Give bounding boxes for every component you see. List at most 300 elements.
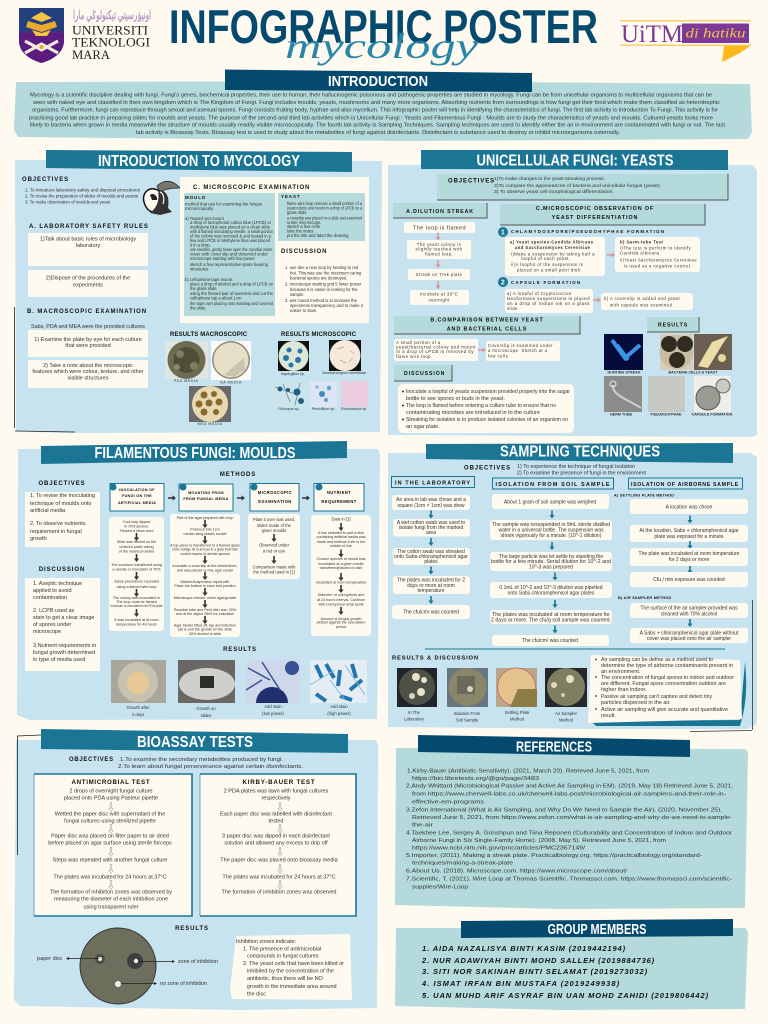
column: isolation of airborne sample: A location was chose <box>666 504 713 510</box>
column 3 steps: a red or eye <box>263 548 286 554</box>
results macroscopic <box>165 332 251 426</box>
mould method box: a) Teased wet mount <box>185 216 225 221</box>
banner: sampling <box>426 443 733 463</box>
reference list: 6.About Us. (2018). Microscope.com. https://www.microscope.com/about/ <box>406 868 628 874</box>
discussion text: specimens transparency and to make it <box>290 303 364 308</box>
column 1 steps: temperature for 48 hours <box>116 622 157 626</box>
photo: air sampler method <box>545 668 587 722</box>
member list: 4. ISMAT IRFAN BIN MUSTAFA (2019249938) <box>421 979 620 988</box>
column 4 steps: Incubated at room temperature <box>316 580 366 584</box>
text box: discussion bullets: Air sampling can be define as a method used to <box>601 657 713 663</box>
column 3 steps <box>248 514 300 579</box>
section A: dilution streak flow: A.DILUTION STREAK <box>406 209 474 215</box>
column 1 steps: a needle or inoculator of 70% <box>113 568 161 572</box>
heading: results bioassay: RESULTS <box>175 926 209 932</box>
photo: PDA plate <box>165 341 208 379</box>
capsule formation: b) A coverslip is added and yeast <box>604 296 680 301</box>
column: isolation of airborne sample: cover was placed onto the air sampler <box>647 636 731 642</box>
banner: bioassay <box>41 729 348 753</box>
yeast method box: under microscope. <box>287 220 321 225</box>
section C: microscopic observation heading: C.MICROSCOPIC OBSERVATION OF <box>536 206 654 212</box>
column 1 steps: Flamed a clean wool <box>120 529 154 533</box>
column 2 steps: Inoculate a coverslip at the wire/bottom, <box>173 564 237 568</box>
discussion: moulds: stain to get a clear image <box>33 615 94 621</box>
column 4 steps: at 24 hours interval. Continue <box>317 598 365 602</box>
text block: introduction paragraph: organisms. Furthermore, fungi can reproduce through sexual and asexual spores. Fungi consists fruiting body, hyphae and also mycelium. This infographic poster will help in identifying the characteristics of fungi. The first lab activity is Introduction To Fungi. This activity is for <box>32 108 718 114</box>
column 2 steps: of the cottage bit to and put in a glass Petri dish <box>172 548 238 552</box>
box: kirby-bauer test: tested <box>269 818 283 824</box>
column 1 steps: Cool loop dipped <box>123 520 150 524</box>
photo: add stain low power: (low power) <box>262 711 284 716</box>
chlamydospore/pseudohyphae formation: Candida Albicans. <box>620 250 661 256</box>
section B: comparison of yeast and bacteria: flame wire loop <box>396 354 431 359</box>
column 2 steps: Poke/cut into 1cm <box>190 528 220 532</box>
discussion text: hot. This was use the maximum caring <box>290 270 362 276</box>
text box: inhibition zones indicate: compounds in fungal cultures <box>247 954 319 960</box>
column: in the laboratory: temperature <box>418 588 445 594</box>
results: yeasts: GERM TUBE <box>610 412 633 416</box>
mould method box: using the flamed pair of tweezers and cut the <box>190 291 274 296</box>
chlamydospore/pseudohyphae formation: and Saccharomyces Cerevisiae <box>515 245 590 250</box>
box: kirby-bauer test: The formation of inhibition zones was observed <box>222 890 336 896</box>
column: isolation from soil: shook vigorously for a minute. (10^-1 dilution) <box>501 533 602 539</box>
mould method box: method that use for examining the fungus <box>185 202 262 206</box>
reference list: 3.Zefon International (What is Air Sampling, and Why Do We Need to Sample the Air). (2020, November 25). <box>406 808 723 814</box>
objectives: sampling: OBJECTIVES <box>464 466 511 472</box>
objectives: bioassay: 2.To learn about fungal perseverance against certain disinfectants. <box>118 764 304 770</box>
heading: results and discussion: RESULTS & DISCUSSION <box>392 656 479 662</box>
method headers: EXAMINATION <box>258 499 292 504</box>
column: isolation from soil: 0.1mL of 10^-2 and 10^-3 dilution was pipetted <box>499 585 603 591</box>
logo: UiTM di hatiku: UiTM <box>621 21 683 48</box>
column: in the laboratory: The cotton swab was streaked <box>397 549 465 555</box>
banner: group members: GROUP MEMBERS <box>548 922 647 938</box>
text box: discussion bullets: are different. Fungal spore concentration outdoor are <box>601 681 726 687</box>
photo: growth on slides: slides <box>201 713 211 718</box>
column: isolation of airborne sample: ISOLATION OF AIRBORNE SAMPLE <box>631 482 739 488</box>
method headers: ARTIFICIAL MEDIA <box>118 501 156 505</box>
objectives box: 1)To make changes to the yeast streaking process. <box>494 176 605 181</box>
panel: introduction <box>14 70 752 141</box>
column 1 steps: Same procedures repeated <box>114 580 159 584</box>
icon: mushroom <box>144 181 180 215</box>
column: isolation of airborne sample: The plate was incubated at room temperature <box>639 551 740 557</box>
column 4 steps: middle of line <box>330 544 352 548</box>
objectives: sampling: 2) To examine the presence of fungi in the environment <box>517 470 646 476</box>
reference list: 5.Importer. (2011). Making a streak plate. Practicalbiology.org. https://practicalbiology.org/standard- <box>406 853 702 859</box>
yeast method box: take the notes <box>287 228 313 234</box>
photo: isolation from soil sample <box>447 668 488 722</box>
objectives: moulds <box>25 481 100 547</box>
column: isolation from soil: bottle for a few minute. Serial dilution for 10^-2 and <box>491 559 611 565</box>
reference list: https://bio.libretexts.org/@go/page/3483 <box>412 776 539 782</box>
results: yeasts: BACTERIA CELLS & YEAST <box>669 370 718 374</box>
photo: cream yeast colonies <box>694 334 732 370</box>
mould method box: MOULD <box>185 195 206 200</box>
section A: laboratory safety rules: experiments <box>73 282 103 288</box>
discussion text: 3. wet mount method is to increase the <box>285 298 358 303</box>
figure: agar plate with inhibition zones: paper disc <box>37 956 63 962</box>
panel: C microscopic examination: C. MICROSCOPIC EXAMINATION <box>193 185 310 191</box>
section C: microscopic observation heading: YEAST DIFFERENTIATION <box>552 215 638 221</box>
column: isolation from soil: onto Sabs-chloramphenicol agar plates <box>508 590 595 596</box>
capsule formation: CAPSULE FORMATION <box>511 280 581 285</box>
objectives: 3. To make observation of moulds and yeast <box>25 200 111 204</box>
photo: germ tube <box>604 376 642 412</box>
column: isolation from soil: ISOLATION FROM SOIL SAMPLE <box>496 482 610 488</box>
text box: discussion bullets: result. <box>601 713 616 719</box>
column 3 steps: Observed under <box>259 542 290 548</box>
column: isolation from soil: 2 days or more. The cfu/g soil sample was counted. <box>491 618 611 624</box>
column 3 steps: Comparison made with <box>253 564 296 570</box>
photo: settling plate method: Method <box>510 716 525 722</box>
discussion: moulds: microscope <box>33 629 61 635</box>
column 3 steps: given moulds <box>262 528 286 533</box>
photo: growth on slides: Growth on <box>196 706 216 711</box>
column: in the laboratory: An area in lab was chose and a <box>396 497 466 503</box>
box: antimicrobial test: placed onto PDA using Pasteur pipette <box>64 796 158 802</box>
column 4 steps: A line selected to part a dish <box>318 531 364 535</box>
box: antimicrobial test: Wetted the paper disc with supernatant of the <box>55 812 165 818</box>
panel: references <box>395 735 748 909</box>
column: isolation of airborne sample: The surface of the air sampler provided was <box>640 606 738 612</box>
reference list: Retrieved June 5, 2021, from https://www.zefon.com/what-is-air-sampling-and-why-do-we-need-to-sample- <box>412 815 732 821</box>
photo: growth after 2 days: 2 days <box>132 712 144 717</box>
objectives: moulds: 2. To observe nutrients <box>30 521 86 527</box>
column: in the laboratory: The cfu/cm² was counted <box>403 610 459 616</box>
objectives: 2. To revise the preparation of slides of moulds and yeasts <box>25 194 138 198</box>
banner: moulds <box>41 441 347 464</box>
column: isolation from soil: The cfu/cm² was counted <box>522 638 578 644</box>
reference list: https://www.ncbi.nlm.nih.gov/pmc/articles/PMC2367149/ <box>412 846 586 852</box>
box: antimicrobial test: using transparent ruler <box>83 904 139 910</box>
box: antimicrobial test: ANTIMICROBIAL TEST <box>72 779 150 786</box>
photo: add stain high power <box>310 660 367 716</box>
column 1 steps: The loop must be flamed <box>116 600 157 604</box>
discussion text: 1. use dee a new loop by heating to red <box>285 265 359 270</box>
text box: inhibition zones indicate: Inhibition zones indicate: <box>236 939 297 945</box>
subtitle: mycology script: mycology <box>285 26 478 66</box>
capsule formation: slide <box>507 306 518 311</box>
column: in the laboratory: square (1cm × 1cm) was drew <box>397 503 465 509</box>
column 2 steps: (all is and the growth on the slide <box>178 628 232 632</box>
photo: in the laboratory <box>397 668 437 722</box>
discussion: moulds: 2. LCPB used as <box>33 608 75 614</box>
photo: isolation from soil sample: Soil Sample <box>456 718 479 722</box>
discussion: moulds: of spores under <box>33 622 71 628</box>
yeast method box: yeast colony and mount in a drop of LPCB on a <box>287 206 363 210</box>
column: isolation from soil: water in a universal bottle. The suspension was <box>499 528 604 534</box>
banner: yeasts: UNICELLULAR FUNGI: YEASTS <box>476 152 674 170</box>
column 2 steps <box>170 514 240 637</box>
text block: introduction paragraph: Mycology is a scientific discipline dealing with fungi. Fungi's genes, biochemical properties, their use to human, their hallucinogenic poisonous and pathogenic properties are studied in mycology. Fungi can be from unicellular organisms to multicellular organisms that can be <box>30 92 712 98</box>
section A: dilution streak flow: flamed loop. <box>425 252 453 256</box>
column 2 steps: cooled layers of dental spread <box>180 552 230 556</box>
box: antimicrobial test: Steps was repeated with another fungal culture <box>53 858 167 864</box>
photo: add stain low power <box>246 660 300 716</box>
discussion: yeasts: Streaking for isolation is to produce isolated colonies of an organism on <box>406 417 568 423</box>
column 4 steps: plotted against the inoculation <box>317 620 365 624</box>
university name: MARA <box>72 47 111 62</box>
column: in the laboratory: area <box>426 530 436 536</box>
panel: filamentous fungi moulds <box>17 441 380 720</box>
column: isolation from soil <box>490 478 614 646</box>
objectives: moulds: requirement in fungal <box>30 529 82 535</box>
column 3 steps: the method used in [1] <box>253 570 295 574</box>
section A: dilution streak flow: overnight <box>428 298 450 302</box>
discussion text: bacterial spores are destroyed. <box>290 276 348 280</box>
text box: inhibition zones indicate: 2. The yeast cells that have been killed or <box>243 961 344 967</box>
results microscopic: RESULTS MICROSCOPIC <box>281 332 357 338</box>
column: in the laboratory: A wet cotton swab was used to <box>397 520 465 526</box>
figure: agar plate with inhibition zones: no zone of inhibition <box>160 981 207 987</box>
reference list <box>406 768 734 890</box>
reference list: the-air <box>412 822 433 828</box>
column 1 steps: in 70% alcohol. <box>124 524 149 528</box>
method headers: FROM FUNGAL MEDIA <box>183 497 229 501</box>
discussion: yeasts: Inoculate a loopful of yeasts suspension provided properly into the sugar <box>406 389 570 395</box>
photo: add stain high power: (high power) <box>327 711 351 716</box>
discussion: yeasts: contaminating microbes are introduced in to the culture <box>406 410 540 416</box>
mould method box: microscopically <box>185 206 214 211</box>
discussion text: DISCUSSION <box>281 249 327 255</box>
objectives: moulds: growth <box>30 536 47 542</box>
section A: laboratory safety rules: 1)Talk about basic rules of microbiology <box>40 236 136 242</box>
column 2 steps: and at the object 2500 for indication <box>176 612 234 616</box>
text box: inhibition zones indicate: 1. The presence of antimicrobial <box>243 946 321 952</box>
yeast method box: flame wire loop remove a small portion of a <box>287 201 363 206</box>
capsule formation: a) A loopful of Cryptococcus <box>507 291 572 296</box>
discussion: moulds <box>25 567 100 671</box>
results: yeasts: CAPSULE FORMATION <box>692 412 733 416</box>
section B: macroscopic examination: Sabs, PDA and MEA were the provided cultures <box>31 324 145 330</box>
mould method box: b) cellophane tape mount <box>185 277 233 282</box>
discussion: yeasts: an agar plate. <box>406 424 440 430</box>
discussion: moulds: fungal growth determined <box>33 650 95 656</box>
column 1 steps: The colony was inoculated in <box>113 596 160 600</box>
column: isolation of airborne sample: Cfu / min exposure was counted <box>653 577 725 583</box>
section A: laboratory safety rules <box>28 224 149 297</box>
photo: add stain high power: Add stain <box>330 704 348 709</box>
objectives <box>22 177 140 204</box>
objectives box: 2)To compare the appearances of bacteria and unicellular fungus (yeast). <box>494 183 661 188</box>
banner: introduction heading: INTRODUCTION <box>328 73 428 90</box>
objectives: moulds: OBJECTIVES <box>38 481 86 487</box>
method headers: MOUNTING FROM <box>188 491 224 495</box>
caption: pseudohyphae: PSEUDOHYPHAE <box>651 412 682 416</box>
method headers: REQUIREMENT <box>321 499 357 504</box>
column: isolation of airborne sample: At the location, Sabs + chloramphenicol agar <box>639 528 739 534</box>
figure: agar plate with inhibition zones: zone of inhibition <box>178 959 218 965</box>
column 2 steps: Possible tube and Petri dish one: 30% <box>174 608 237 612</box>
banner: introduction heading <box>225 70 532 92</box>
chlamydospore/pseudohyphae formation: a) Yeast species-Candida Albicans <box>510 240 594 244</box>
section B: macroscopic examination: B. MACROSCOPIC EXAMINATION <box>27 309 147 315</box>
mould method box: the glass slide <box>190 286 217 291</box>
reference list: Airborne Fungi in Six Single-Family Home). (2008, May 5). Retrieved June 5, 2021, from <box>412 838 666 844</box>
section B: comparison of yeast and bacteria: few cells <box>488 354 508 358</box>
jawi script line: اونيۏرسيتي تيكنولوݢي مارا <box>73 8 151 23</box>
mould method box: sketch a few representative spore bearing <box>190 262 269 267</box>
mould method box: few and LPCB or Methylene blue was placed <box>190 238 271 243</box>
text box: inhibition zones indicate: growth in the immediate area around <box>247 984 337 990</box>
objectives: sampling <box>464 464 646 476</box>
panel: unicellular fungi yeasts <box>388 150 757 437</box>
column 4 steps: transferred/placed on dish <box>320 566 362 570</box>
photo: Penicillium <box>310 381 337 407</box>
photo: isolation from soil sample: Isolation From <box>454 711 481 716</box>
results macroscopic: MEA MEDIA <box>198 422 223 426</box>
method headers: MICROSCOPIC <box>258 490 292 495</box>
column 2 steps: and was placed on the agar center <box>177 568 234 572</box>
photo: pseudohyphae <box>648 376 685 412</box>
column 4 steps: Amount of fungus growth <box>320 617 362 621</box>
text box: discussion bullets: The concentration of fungal spores in indoor and outdoor <box>601 675 734 681</box>
member list: 1. AIDA NAZALISYA BINTI KASIM (2019442194) <box>422 944 626 953</box>
objectives: bioassay <box>69 757 304 770</box>
section A: laboratory safety rules: A. LABORATORY SAFETY RULES <box>29 224 149 230</box>
column 4 steps: containing artificial media was <box>316 535 366 539</box>
chlamydospore/pseudohyphae formation: ii)A loopful of the suspension is <box>511 262 583 267</box>
column 3 steps: Plate it over was used, <box>253 517 295 522</box>
box: antimicrobial test: measuring the diameter of each inhibition zone <box>54 896 168 902</box>
university name <box>72 22 150 62</box>
results microscopic <box>272 332 368 411</box>
section B: comparison of yeast and bacteria: AND BACTERIAL CELLS <box>447 326 527 332</box>
mould method box: the tape over placing onto staining and covered <box>190 301 274 306</box>
column: isolation of airborne sample: cleaned with 70% alcohol <box>661 612 717 618</box>
column: isolation of airborne sample <box>614 478 748 643</box>
column: in the laboratory: days or more at room <box>407 583 455 589</box>
objectives: 1. To introduce laboratory safety and disposal procedures <box>25 188 140 192</box>
box: kirby-bauer test: Each paper disc was labelled with disinfectant <box>220 812 332 818</box>
chlamydospore/pseudohyphae formation: 1 <box>501 230 505 236</box>
column 4 steps: Diameter of colony/lines and <box>318 593 364 597</box>
column: in the laboratory: The plates was incubated for 2 <box>397 578 465 584</box>
results microscopic: Aspergillus sp. <box>281 372 305 376</box>
panel: group members <box>395 919 748 1010</box>
column: isolation from soil: About 1 gram of soil sample was weighed <box>504 500 596 506</box>
photo: bacteria cells and yeast <box>660 334 694 370</box>
box: kirby-bauer test: 2 PDA plates was lawn with fungal cultures <box>224 788 329 794</box>
results macroscopic: NA MEDIA <box>220 380 242 384</box>
column: in the laboratory: plates <box>424 559 438 565</box>
mould method box: place a drop of alcohol and a drop of LPCB on <box>190 282 274 286</box>
column 2 steps: 30% alcohol is slide <box>189 632 221 636</box>
text box: discussion bullets: an environment. <box>601 669 641 675</box>
text box: inhibition zones indicate <box>230 934 352 1000</box>
banner: moulds: FILAMENTOUS FUNGI: MOULDS <box>94 445 296 462</box>
reference list: 1.Kirby-Bauer (Antibiotic Sensitivity). (2021, March 20). Retrieved June 5, 2021, from <box>407 768 649 774</box>
method headers <box>110 484 364 511</box>
banner: references <box>418 735 690 757</box>
box: antimicrobial test: before placed on agar surface using sterile forceps <box>48 840 172 846</box>
discussion: moulds: in type of media used <box>33 657 85 663</box>
mould method box: of the colony was removed & and teased in a <box>190 234 272 238</box>
banner: introduction to mycology: INTRODUCTION TO MYCOLOGY <box>98 153 301 170</box>
column 4 steps: inoculated at a given media <box>319 562 364 566</box>
column 2 steps: media using plastic socket <box>183 532 227 536</box>
mould method box: it in a drop. <box>190 242 211 248</box>
column: isolation of airborne sample: A Sabs + chloramphenicol agar plate without <box>640 630 739 636</box>
section A: dilution streak flow: Incubate at 30°C <box>420 292 458 296</box>
photo: air sampler method: Method <box>559 718 574 722</box>
photo: streak plate <box>604 334 643 370</box>
discussion: moulds: contamination <box>33 595 67 601</box>
objectives box <box>437 174 728 200</box>
column 4 steps: made and method a stir in the <box>317 540 365 544</box>
mould method box: the slide <box>190 306 206 310</box>
column: in the laboratory <box>392 476 474 619</box>
photo: growth after 2 days <box>111 660 166 717</box>
panel: sampling techniques <box>388 443 757 732</box>
method headers: NUTRIENT <box>327 490 351 495</box>
discussion: yeasts: The loop is flamed before entering a culture tube to ensure that no <box>406 403 556 409</box>
column 4 steps: Chosen species of mould was <box>316 557 366 561</box>
objectives: bioassay: 1.To examine the secondary metabolites produced by fungi. <box>120 757 284 763</box>
yeast method box: a coverslip was placed on a slide and examined <box>287 216 363 220</box>
box: antimicrobial test: 2 drops of overnight fungal culture <box>69 788 153 794</box>
results microscopic: Saccharomyces cerevisiae <box>322 371 366 375</box>
column 1 steps: using a flamed wire loop <box>117 585 156 589</box>
photo: add stain low power: Add stain <box>264 704 282 709</box>
box: antimicrobial test: Paper disc was placed on filter paper to air dried <box>51 834 169 840</box>
photo: growth after 2 days: Growth after <box>126 705 150 710</box>
chlamydospore/pseudohyphae formation: b) Germ-tube Test <box>620 240 664 244</box>
box: kirby-bauer test: respectively <box>261 796 291 802</box>
objectives: moulds: artificial media <box>30 508 66 514</box>
column: isolation from soil: 10^-3 was prepared <box>529 564 573 570</box>
section A: dilution streak flow: Streak on Trek plate <box>416 272 462 277</box>
icon: shield crest <box>19 8 64 63</box>
logo: UiTM di hatiku: di hatiku <box>686 26 746 42</box>
column 4 steps: period <box>336 625 346 629</box>
objectives: moulds: technique of moulds onto <box>30 501 91 507</box>
capsule formation: 2 <box>501 280 505 286</box>
university name: TEKNOLOGI <box>72 34 150 50</box>
discussion: moulds: 3.Nutrient requirements in <box>33 643 96 649</box>
mould method box: with a flamed inoculating needle, a small portion <box>190 229 274 234</box>
column: in the laboratory: IN THE LABORATORY <box>395 480 471 486</box>
section B: macroscopic examination: that were provided <box>65 343 111 349</box>
column 1 steps: It was incubated at at room <box>114 618 159 622</box>
chlamydospore/pseudohyphae formation: i)Make a suspension by taking half a <box>511 252 595 256</box>
photo: NA plate <box>211 341 251 380</box>
photo: in the laboratory: Laboratory <box>404 716 425 722</box>
banner: sampling: SAMPLING TECHNIQUES <box>500 444 660 460</box>
column 1 steps: of the media provided <box>119 550 154 554</box>
figure: agar plate with inhibition zones <box>37 928 218 1004</box>
column 1 steps <box>109 517 164 631</box>
text box: discussion bullets: particles dispersed in the air. <box>601 700 671 706</box>
logo: UiTM di hatiku <box>620 20 751 62</box>
mould method box <box>184 193 275 316</box>
discussion: yeasts: DISCUSSION <box>404 371 445 377</box>
section B: comparison of yeast and bacteria: yeast/bacterial colony and mount <box>396 344 476 350</box>
header: UiTM university logo <box>19 8 151 63</box>
box: kirby-bauer test <box>200 774 356 916</box>
capsule formation <box>498 277 693 313</box>
objectives: bioassay: OBJECTIVES <box>69 757 114 763</box>
photo: growth on slides <box>178 660 235 718</box>
chlamydospore/pseudohyphae formation: placed on a small petri dish. <box>517 268 582 272</box>
section B: comparison of yeast and bacteria: in a drop of LPCB is removed by <box>396 349 474 354</box>
discussion text: 2. microscope starting grid 5 lower power <box>285 282 362 286</box>
text block: introduction paragraph: lab activity is Bioassay Tests. Bioassay test is used to study about the metabolites of fungi against disinfectants. Disinfectant is substance used to destroy or inhibit microorganisms externally. <box>136 130 620 136</box>
capsule formation: with capsule was examined <box>610 302 672 308</box>
chlamydospore/pseudohyphae formation: ii)Yeast Saccharomyces Cerevisiae <box>620 258 697 262</box>
results microscopic: Rhizopus sp. <box>278 407 300 411</box>
